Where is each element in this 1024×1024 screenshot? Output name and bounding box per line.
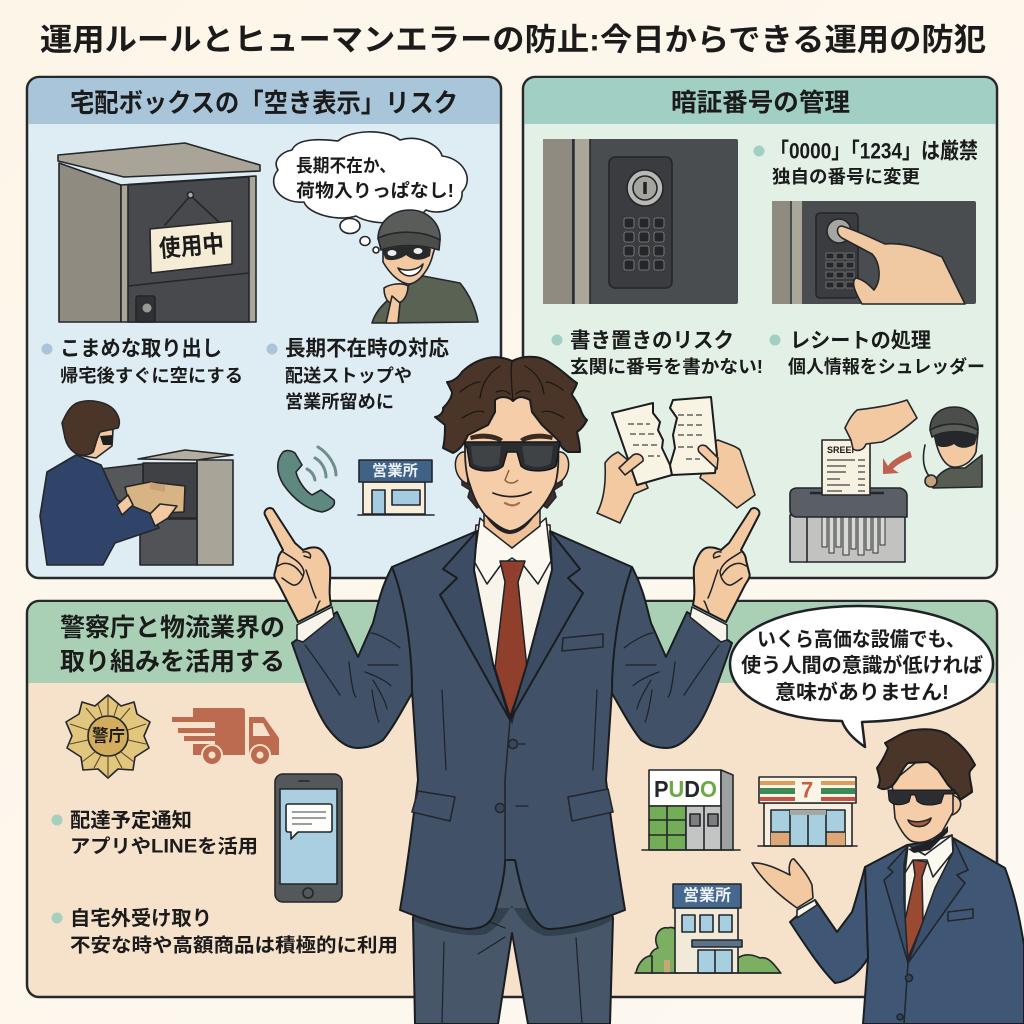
- right hand pointing up: [693, 508, 759, 622]
- speech bubble: 使う人間の意識が低ければ: [741, 653, 983, 677]
- hair: [435, 357, 587, 453]
- bullet: written note risk: [552, 330, 763, 377]
- icon: sales office building: [635, 884, 781, 973]
- panel: PIN management: [523, 77, 997, 578]
- bullet: frequent pickup: [42, 338, 243, 386]
- bullet: receipt handling: レシートの処理: [790, 330, 931, 352]
- lenses: [471, 446, 553, 467]
- shirt: [470, 525, 553, 722]
- chin shadow line: [485, 515, 535, 534]
- character: presenter small: [752, 729, 1024, 1024]
- icon: convenience store: 7: [801, 778, 813, 802]
- nose: [505, 470, 518, 483]
- trouser creases: [442, 922, 582, 1024]
- small presenter cuff: [797, 900, 817, 918]
- bullet: long absence: [266, 338, 449, 412]
- mouth: [493, 492, 531, 497]
- heading: police and logistics: [60, 614, 285, 676]
- right cuff: [690, 607, 727, 642]
- heading: PIN management: 暗証番号の管理: [671, 89, 850, 117]
- small presenter details: [897, 909, 973, 1024]
- thought bubble: 長期不在か、: [296, 156, 396, 176]
- icon: smartphone with message: [275, 774, 342, 902]
- small presenter shirt: [905, 835, 952, 960]
- bullet: frequent pickup: こまめな取り出し: [60, 338, 222, 360]
- necktie: [495, 561, 527, 716]
- panel: delivery box risk: [27, 77, 501, 578]
- small presenter tie: [904, 860, 927, 958]
- icon: PUDO locker: PUDO: [654, 776, 717, 802]
- icon: sales office building: 営業所: [683, 886, 731, 904]
- icon: red arrow: [883, 451, 912, 474]
- bullet: delivery notice: 配達予定通知: [70, 809, 192, 832]
- bullet: offsite pickup: [52, 907, 398, 956]
- thought bubble: [274, 132, 467, 253]
- left arm folds: [305, 633, 400, 722]
- left cuff: [297, 607, 334, 642]
- small presenter lapels: [884, 838, 968, 963]
- eyebrows: [470, 434, 553, 442]
- icon: police badge: [66, 695, 150, 778]
- speech bubble: [730, 606, 993, 747]
- icon: delivery truck: [172, 708, 279, 765]
- speech bubble: いくら高価な設備でも、: [757, 628, 965, 651]
- bullet: frequent pickup: 帰宅後すぐに空にする: [60, 366, 243, 386]
- sunglasses: [464, 442, 560, 471]
- bullet: banned codes: 独自の番号に変更: [772, 167, 920, 187]
- illustration: shredder and receipt: [790, 400, 917, 562]
- character: main presenter: [265, 357, 759, 1024]
- hair strands: [460, 361, 564, 418]
- right lapel: [510, 531, 583, 720]
- illustration: finger on lock: [772, 201, 976, 304]
- bullet: written note risk: 書き置きのリスク: [570, 330, 734, 352]
- icon: convenience store: [758, 777, 857, 846]
- panel header: PIN: [524, 78, 996, 124]
- heading: delivery box risk: 宅配ボックスの「空き表示」リスク: [70, 88, 458, 118]
- bullet: receipt handling: [770, 330, 985, 377]
- ears: [455, 452, 569, 484]
- bullet: long absence: 長期不在時の対応: [285, 338, 449, 360]
- trousers: [413, 860, 613, 1024]
- panel header: police and logistics: [28, 602, 996, 683]
- icon: telephone: [278, 447, 336, 512]
- heading: police and logistics: 警察庁と物流業界の: [60, 614, 285, 642]
- illustration: delivery box with sign: 使用中: [158, 231, 225, 263]
- bullet: long absence: 営業所留めに: [285, 392, 394, 412]
- illustration: keypad lock: [543, 139, 738, 304]
- trouser shadow: [414, 905, 612, 936]
- illustration: man emptying box: [40, 401, 233, 565]
- small presenter head: [877, 729, 975, 853]
- face: [465, 395, 558, 531]
- left arm: [292, 567, 420, 748]
- bullet: receipt handling: 個人情報をシュレッダー: [788, 356, 985, 377]
- illustration: thief watching: [923, 407, 982, 488]
- bullet: offsite pickup: 自宅外受け取り: [70, 907, 212, 930]
- thought bubble: 荷物入りっぱなし!: [296, 180, 454, 201]
- jacket body: [392, 531, 632, 929]
- small presenter collar: [905, 835, 953, 877]
- speech bubble: 意味がありません!: [775, 680, 949, 704]
- bullet: written note risk: 玄関に番号を書かない!: [570, 356, 763, 377]
- small presenter arm: [790, 867, 868, 983]
- left lapel: [440, 531, 510, 720]
- illustration: delivery box with sign: [58, 143, 260, 322]
- title: 運用ルールとヒューマンエラーの防止:今日からできる運用の防犯: [40, 22, 986, 58]
- left hand pointing up: [265, 508, 331, 622]
- icon: sales office: [358, 460, 434, 515]
- bullet: banned codes: 「0000」「1234」は厳禁: [770, 138, 978, 164]
- heading: police and logistics: 取り組みを活用する: [60, 648, 285, 676]
- icon: police badge: 警庁: [92, 726, 125, 746]
- panel: police and logistics: [27, 601, 1024, 1024]
- small presenter hand: [752, 859, 813, 908]
- bullet: delivery notice: アプリやLINEを活用: [70, 836, 258, 858]
- lower lip: [505, 503, 519, 505]
- right arm folds: [624, 633, 719, 722]
- icon: sales office: 営業所: [372, 462, 418, 480]
- bullet: long absence: 配送ストップや: [285, 366, 412, 386]
- panel header: delivery box: [28, 78, 500, 124]
- back hair: [462, 470, 562, 508]
- icon: PUDO locker: [642, 770, 740, 850]
- illustration: thief thinking: [372, 210, 478, 323]
- bullet: offsite pickup: 不安な時や高額商品は積極的に利用: [70, 934, 398, 956]
- right arm: [604, 567, 732, 748]
- small presenter jacket: [863, 838, 1024, 1024]
- neck: [484, 505, 540, 548]
- collar: [474, 518, 551, 584]
- bullet: banned codes: [754, 138, 978, 187]
- bullet: delivery notice: [52, 809, 258, 858]
- jacket details: [412, 634, 613, 860]
- illustration: shredder and receipt: SREEI: [827, 445, 854, 455]
- illustration: torn note in hands: [597, 397, 755, 523]
